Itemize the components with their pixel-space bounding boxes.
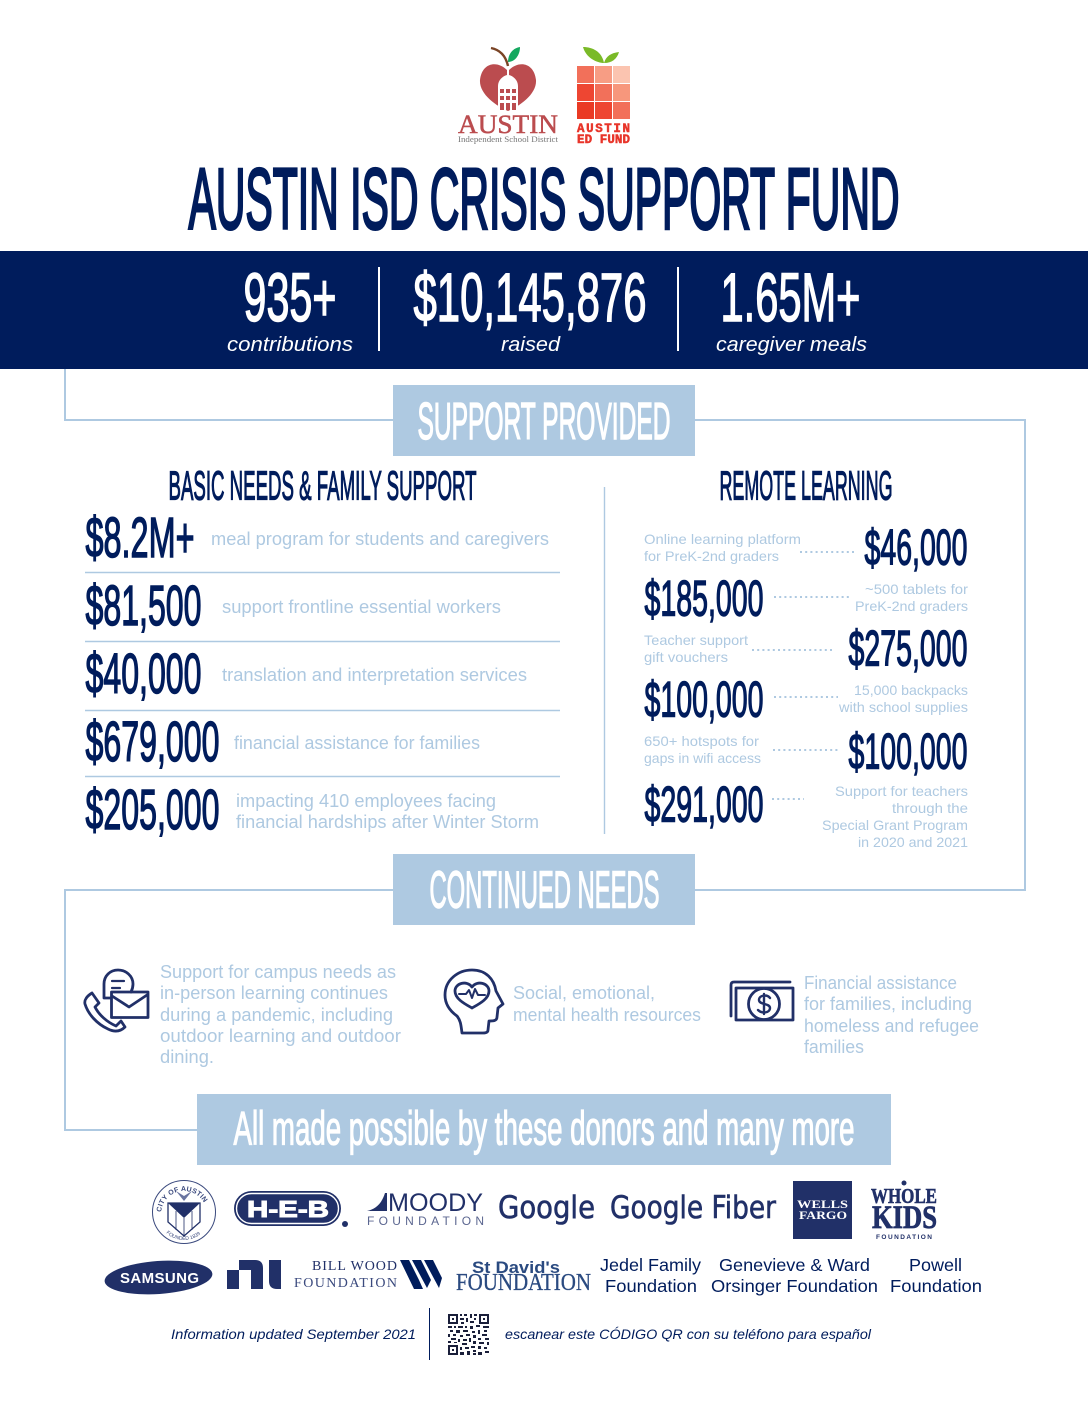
row: winter storm: financial hardships after Winter Storm [236,812,539,832]
logo: Austin Ed Fund: ED FUND [577,133,630,147]
text: mental health: mental health resources [513,1004,701,1025]
logo: Austin Ed Fund: AUSTIN [577,122,630,136]
panel: remote learning [644,462,968,850]
logo: Wells Fargo [793,1181,852,1239]
logo: H-E-B [234,1191,348,1227]
row: tablets: PreK-2nd graders [855,598,968,614]
row: special grant program: Special Grant Program [822,817,968,833]
logo: Samsung: SAMSUNG [120,1270,199,1287]
row: tablets: ~500 tablets for [865,581,968,597]
stat: contributions [227,259,353,356]
text: campus support: during a pandemic, including [160,1004,393,1025]
text: financial assistance: for families, including [804,993,972,1014]
stat: contributions: contributions [227,334,353,356]
logo: St. David's Foundation: St David's [472,1258,560,1277]
logo: City of Austin seal [152,1180,216,1244]
need: mental health [445,970,701,1033]
row: online platform [644,519,968,575]
row: special grant program: Support for teachers [835,783,968,799]
stat: contributions: 935+ [244,259,336,336]
text: campus support: dining. [160,1046,214,1067]
text: financial assistance: homeless and refugee [804,1015,979,1036]
text: campus support: Support for campus needs as [160,961,396,982]
row: winter storm: $205,000 [86,778,220,842]
logo: City of Austin seal: FOUNDED 1839 [166,1230,200,1240]
stat: caregiver meals: caregiver meals [716,334,867,356]
footer note: date: Information updated September 2021 [171,1326,416,1342]
banner: headline stats [0,251,1088,369]
row: online platform: for PreK-2nd graders [644,548,779,564]
text: campus support: in-person learning continues [160,982,388,1003]
heading: support provided [393,385,695,456]
text: Powell Foundation: Powell [909,1255,962,1275]
logo: Austin Independent School District: Independent School District [458,135,559,144]
row: tablets [644,570,968,626]
text: Powell Foundation: Foundation [890,1276,982,1296]
text: mental health: Social, emotional, [513,982,655,1003]
row: frontline workers: $81,500 [86,574,202,638]
logo: Moody Foundation: FOUNDATION [367,1214,484,1228]
row: hotspots [644,723,968,779]
text: campus support [160,961,401,1067]
row: gift vouchers: $275,000 [848,620,968,676]
row: meal program: $8.2M+ [86,506,194,570]
row: special grant program: $291,000 [644,776,764,832]
row: hotspots: $100,000 [848,723,968,779]
logo: Bill Wood Foundation: BILL WOOD [312,1259,397,1274]
icon: cash [731,982,793,1020]
row: meal program: meal program for students and caregivers [211,529,549,549]
logo: Google Fiber: Google Fiber [610,1190,776,1226]
row: translation [86,642,527,706]
logo: Bill Wood Foundation: FOUNDATION [294,1276,397,1291]
heading: continued needs: CONTINUED NEEDS [430,862,660,920]
row: winter storm: impacting 410 employees facing [236,791,496,811]
text: mental health [513,982,701,1025]
text: financial assistance: families [804,1036,864,1057]
text: Genevieve and Ward Orsinger Foundation: Orsinger Foundation [711,1276,878,1296]
text: financial assistance: Financial assistance [804,972,957,993]
logo: Austin Independent School District: AUSTIN [458,110,558,139]
logo: St. David's Foundation [456,1258,591,1296]
row: gift vouchers [644,620,968,676]
logo: Whole Kids Foundation: WHOLE [871,1184,937,1208]
logo: St. David's Foundation: FOUNDATION [456,1270,591,1296]
need: financial assistance [731,972,979,1057]
text: Jedel Family Foundation: Foundation [605,1276,697,1296]
row: gift vouchers: gift vouchers [644,649,728,665]
logo: Samsung [103,1257,214,1298]
text: campus support: outdoor learning and outdoor [160,1025,401,1046]
row: translation: $40,000 [86,642,202,706]
row: financial assistance: $679,000 [86,710,220,774]
row: gift vouchers: Teacher support [644,632,748,648]
logo: H-E-B: H-E-B [247,1196,329,1222]
text: financial assistance [804,972,979,1057]
row: translation: translation and interpretation services [222,665,527,685]
icon: phone, chat bubble and envelope [85,970,148,1031]
text: Jedel Family Foundation [600,1255,701,1296]
stat: raised: raised [501,334,561,356]
row: online platform: Online learning platform [644,531,801,547]
logo: Bill Wood Foundation [294,1259,442,1291]
logo: Google: Google [498,1190,595,1226]
text: Jedel Family Foundation: Jedel Family [600,1255,701,1275]
logo: Austin Ed Fund [577,47,630,147]
row: online platform: $46,000 [864,519,968,575]
logo: National Instruments [227,1260,281,1289]
row: tablets: $185,000 [644,570,764,626]
row: special grant program [644,776,968,850]
logo: Moody Foundation: MOODY [388,1189,483,1217]
text: Powell Foundation [890,1255,982,1296]
row: backpacks: 15,000 backpacks [854,682,968,698]
heading: continued needs [393,854,695,925]
heading: support provided: SUPPORT PROVIDED [418,393,670,451]
text: Genevieve and Ward Orsinger Foundation: Genevieve & Ward [719,1255,870,1275]
logo: Wells Fargo: WELLS [797,1199,848,1211]
need: campus support [85,961,401,1067]
row: winter storm [86,778,539,842]
frame lines [65,369,1025,1130]
row: special grant program: through the [892,800,968,816]
row: backpacks: with school supplies [838,699,968,715]
logo: Whole Kids Foundation [871,1180,937,1241]
row: meal program [86,506,549,570]
panel: basic needs and family support: BASIC NEEDS & FAMILY SUPPORT [168,462,476,508]
logo: Austin Independent School District [458,47,559,144]
logo: Whole Kids Foundation: KIDS [872,1200,937,1236]
panel: basic needs and family support [85,462,560,842]
logo: Whole Kids Foundation: FOUNDATION [876,1234,932,1241]
heading: donors [197,1094,891,1165]
stat: raised: $10,145,876 [414,259,646,336]
logo: City of Austin seal: CITY OF AUSTIN [156,1186,208,1212]
stat: caregiver meals: 1.65M+ [720,259,860,336]
row: hotspots: gaps in wifi access [644,750,761,766]
footer note: Spanish QR instruction: escanear este CÓDIGO QR con su teléfono para español [505,1326,872,1342]
logo: Moody Foundation [367,1189,484,1228]
row: financial assistance: financial assistance for families [234,733,480,753]
row: backpacks: $100,000 [644,671,764,727]
stat: caregiver meals [716,259,867,356]
row: frontline workers: support frontline essential workers [222,597,501,617]
row: frontline workers [86,574,501,638]
row: backpacks [644,671,968,727]
QR code [448,1314,489,1355]
row: financial assistance [86,710,480,774]
icon: head with heart [445,970,503,1033]
row: hotspots: 650+ hotspots for [644,733,759,749]
logo: Wells Fargo: FARGO [799,1210,847,1222]
row: special grant program: in 2020 and 2021 [858,834,968,850]
stat: raised [414,259,646,356]
text: Genevieve and Ward Orsinger Foundation [711,1255,878,1296]
